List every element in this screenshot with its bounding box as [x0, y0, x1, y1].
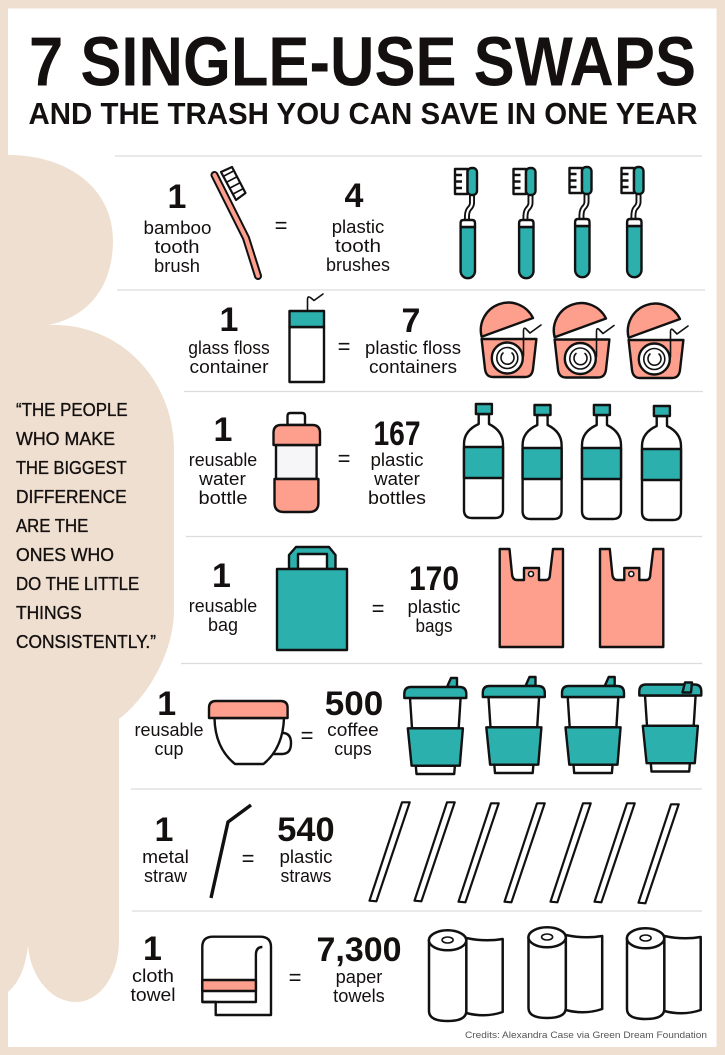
icon: plastic straws: [370, 802, 679, 903]
icon: plastic bags: [500, 549, 663, 647]
label: 1 reusable bag: bag: [208, 615, 238, 635]
label: 1 cloth towel: 1: [143, 930, 162, 968]
label: 1 reusable cup: [134, 685, 204, 759]
label: 1 glass floss container: 1: [220, 301, 238, 339]
equals sign: =: [275, 213, 287, 238]
label: 4 plastic tooth brushes: 4: [345, 177, 364, 215]
row 1: toothbrush swap: [144, 167, 644, 278]
equals sign: =: [301, 723, 313, 748]
label: 1 reusable bag: 1: [212, 557, 231, 595]
label: 4 plastic tooth brushes: plastic: [332, 217, 384, 237]
label: 1 metal straw: 1: [155, 811, 173, 849]
label: 4 plastic tooth brushes: brushes: [326, 255, 390, 275]
label: 1 glass floss container: container: [190, 357, 268, 377]
label: 170 plastic bags: plastic: [408, 597, 460, 617]
label: 1 glass floss container: glass floss: [188, 338, 270, 358]
icon: reusable water bottle: [274, 413, 320, 512]
icon: metal straw: [211, 805, 251, 898]
label: 1 reusable water bottle: [189, 411, 257, 508]
label: 4 plastic tooth brushes: tooth: [335, 236, 381, 256]
quote text block: WHO MAKE: [16, 428, 115, 449]
icon: plastic floss containers: [481, 303, 688, 378]
label: 1 reusable water bottle: reusable: [189, 450, 257, 470]
label: 1 metal straw: metal: [142, 847, 189, 867]
icon: reusable tote bag: [277, 547, 347, 650]
label: 1 reusable water bottle: 1: [214, 411, 232, 449]
icon: bamboo toothbrush: [214, 167, 258, 276]
row 2: floss swap: [188, 294, 688, 382]
label: 167 plastic water bottles: bottles: [368, 488, 426, 508]
subtitle: AND THE TRASH YOU CAN SAVE IN ONE YEAR: [28, 96, 698, 131]
equals sign: =: [372, 596, 384, 621]
icon: coffee cups: [404, 677, 701, 774]
label: 170 plastic bags: 170: [409, 560, 459, 598]
label: 1 reusable cup: 1: [157, 685, 176, 723]
label: 167 plastic water bottles: 167: [374, 415, 420, 453]
icon: plastic toothbrushes: [455, 167, 644, 278]
label: 7,300 paper towels: [316, 931, 402, 1006]
label: 170 plastic bags: bags: [416, 616, 452, 636]
label: 1 reusable cup: reusable: [134, 720, 204, 740]
label: 170 plastic bags: [408, 560, 460, 636]
quote text block: CONSISTENTLY.”: [16, 631, 156, 652]
quote text block: THINGS: [16, 602, 82, 623]
row 7: towel swap: [130, 927, 701, 1021]
label: 1 reusable water bottle: water: [198, 469, 246, 489]
quote text block: DIFFERENCE: [16, 486, 127, 507]
label: 7 plastic floss containers: containers: [369, 357, 457, 377]
label: 540 plastic straws: 540: [277, 811, 335, 849]
label: 1 bamboo tooth brush: tooth: [154, 237, 200, 257]
row 3: water bottle swap: [189, 404, 681, 520]
panel: beige quote blob: [8, 155, 174, 1002]
label: 1 bamboo tooth brush: 1: [168, 178, 186, 216]
label: 500 coffee cups: cups: [334, 739, 372, 759]
label: 7,300 paper towels: paper: [336, 967, 382, 987]
equals sign: =: [242, 846, 254, 871]
row 6: straw swap: [142, 802, 679, 903]
label: 7 plastic floss containers: [365, 302, 461, 377]
label: 167 plastic water bottles: [368, 415, 426, 508]
row 5: cup swap: [134, 677, 701, 774]
label: 540 plastic straws: [277, 811, 335, 886]
label: 540 plastic straws: straws: [280, 866, 332, 886]
label: 1 bamboo tooth brush: [144, 178, 212, 276]
row 4: bag swap: [189, 547, 663, 650]
label: 167 plastic water bottles: water: [373, 469, 420, 489]
label: 500 coffee cups: coffee: [327, 720, 379, 740]
label: 1 cloth towel: [130, 930, 176, 1005]
icon: glass floss container: [290, 294, 324, 382]
credits: Credits: Alexandra Case via Green Dream Foundation: [465, 1030, 707, 1041]
label: 540 plastic straws: plastic: [280, 847, 332, 867]
icon: cloth towel: [202, 937, 271, 1015]
label: 500 coffee cups: [325, 685, 383, 759]
quote text block: THE BIGGEST: [16, 457, 127, 478]
label: 1 cloth towel: cloth: [132, 966, 174, 986]
quote text block: “THE PEOPLE: [16, 399, 128, 420]
label: 1 bamboo tooth brush: brush: [154, 256, 200, 276]
label: 1 cloth towel: towel: [130, 985, 176, 1005]
label: 500 coffee cups: 500: [325, 685, 383, 723]
label: 167 plastic water bottles: plastic: [370, 450, 424, 470]
equals sign: =: [338, 334, 350, 359]
label: 4 plastic tooth brushes: [326, 177, 390, 275]
quote text block: DO THE LITTLE: [16, 573, 139, 594]
equals sign: =: [289, 965, 301, 990]
label: 1 reusable bag: reusable: [189, 596, 257, 616]
icon: plastic water bottles: [464, 404, 681, 520]
label: 7,300 paper towels: towels: [333, 986, 385, 1006]
label: 1 glass floss container: [188, 301, 270, 377]
icon: reusable cup: [209, 701, 291, 764]
label: 1 reusable cup: cup: [154, 739, 184, 759]
icon: paper towel rolls: [429, 927, 701, 1021]
label: 7,300 paper towels: 7,300: [316, 931, 402, 969]
label: 7 plastic floss containers: plastic floss: [365, 338, 461, 358]
label: 7 plastic floss containers: 7: [402, 302, 420, 340]
label: 1 reusable water bottle: bottle: [198, 488, 248, 508]
quote text block: ARE THE: [16, 515, 88, 536]
equals sign: =: [338, 446, 350, 471]
label: 1 metal straw: [142, 811, 189, 886]
label: 1 metal straw: straw: [144, 866, 188, 886]
quote text block: [16, 399, 156, 652]
label: 1 bamboo tooth brush: bamboo: [144, 218, 212, 238]
quote text block: ONES WHO: [16, 544, 114, 565]
label: 1 reusable bag: [189, 557, 257, 635]
